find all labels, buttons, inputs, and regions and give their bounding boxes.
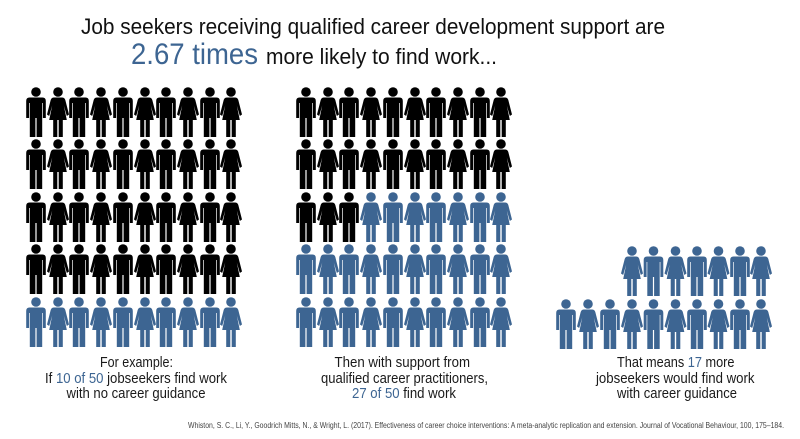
title xyxy=(81,14,665,71)
pictogram: 10 of 50 find work xyxy=(26,87,242,347)
caption: no career guidance xyxy=(45,355,228,402)
caption: 17 more jobseekers: jobseekers would find work xyxy=(595,371,755,387)
headline line 2: more likely to find work... xyxy=(266,44,497,69)
caption: with support xyxy=(321,355,488,402)
pictogram: 17 more find work xyxy=(556,246,772,349)
caption: no career guidance: with no career guidance xyxy=(66,386,205,402)
caption: no career guidance: If 10 of 50 jobseekers find work xyxy=(45,371,228,387)
pictogram: 27 of 50 find work xyxy=(296,87,512,347)
caption: no career guidance: For example: xyxy=(100,355,173,371)
highlighted statistic: 2.67 times: 2.67 times xyxy=(131,38,258,71)
caption: with support: qualified career practitioners, xyxy=(321,371,488,387)
caption: 17 more jobseekers: That means 17 more xyxy=(617,355,734,371)
caption: with support: Then with support from xyxy=(334,355,470,371)
caption: 17 more jobseekers xyxy=(595,355,755,402)
headline line 1: Job seekers receiving qualified career development support are xyxy=(81,14,665,39)
caption: with support: 27 of 50 find work xyxy=(352,386,457,402)
caption: 17 more jobseekers: with career guidance xyxy=(616,386,737,402)
